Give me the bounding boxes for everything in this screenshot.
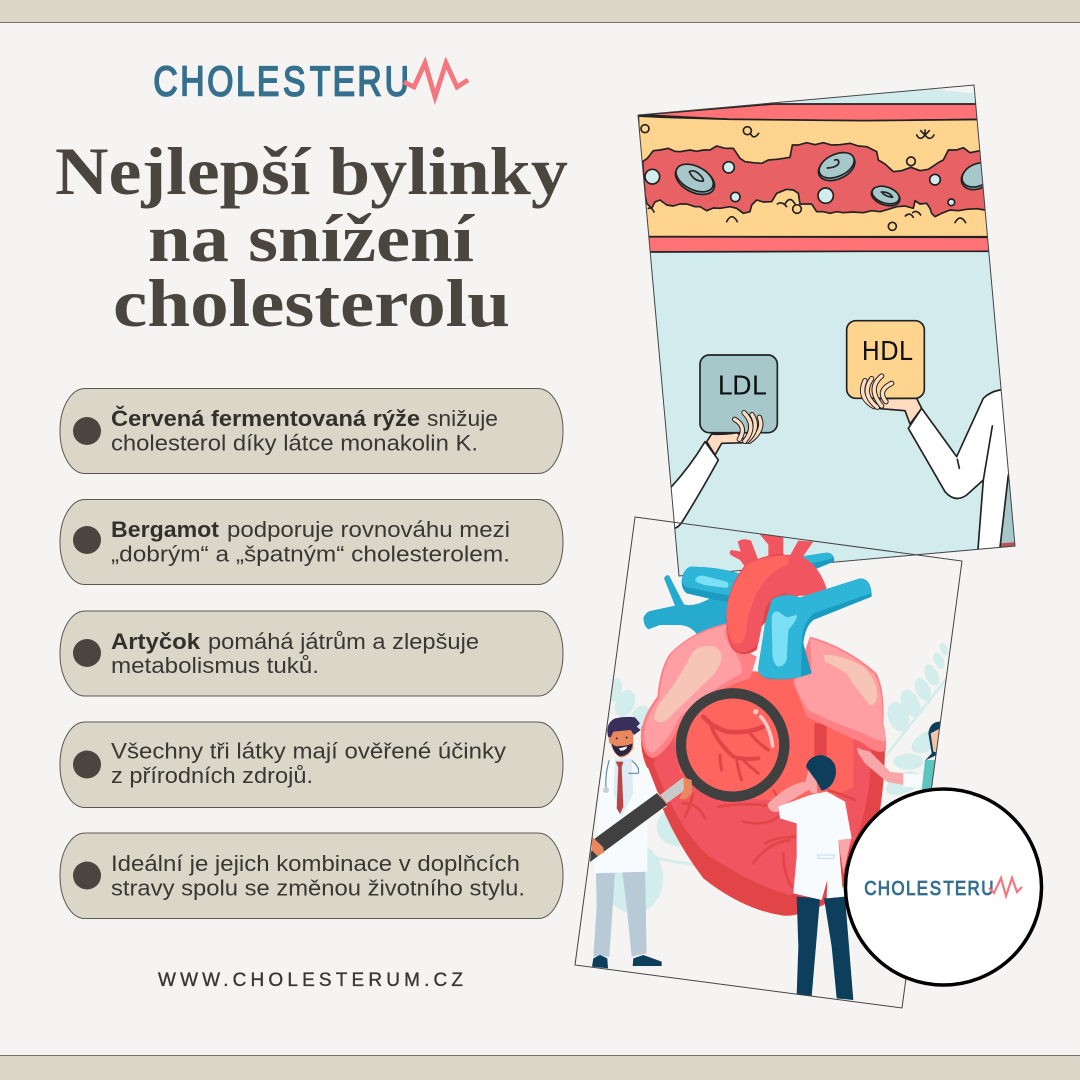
illustration: heart and doctors — [575, 517, 962, 1008]
list item 3: artichoke: pomáhá játrům a zlepšuje — [208, 629, 479, 654]
blood flow — [643, 143, 997, 217]
list item 2: bergamot: podporuje rovnováhu mezi — [227, 517, 510, 542]
list item 5: combination: Ideální je jejich kombinace v doplňcích — [111, 851, 520, 876]
stethoscope — [606, 760, 639, 788]
tie — [616, 762, 623, 814]
heart body — [641, 670, 885, 916]
artery wall — [638, 104, 997, 121]
illustration: artery with LDL and HDL — [630, 80, 1030, 590]
vessels behind heart — [643, 530, 834, 634]
title: cholesterolu — [113, 265, 510, 341]
hands — [592, 777, 692, 856]
badge: circular logo — [846, 789, 1042, 985]
list item 2: bergamot: „dobrým“ a „špatným“ cholesterolem. — [111, 542, 510, 566]
list item 5: combination — [60, 833, 563, 918]
magnifying glass — [681, 693, 784, 797]
teal and red corner — [1000, 480, 1014, 547]
website address: WWW.CHOLESTERUM.CZ — [158, 970, 463, 991]
list item 3: artichoke — [60, 611, 563, 696]
bottom bar — [0, 1056, 1080, 1080]
leaves — [603, 642, 953, 913]
list item 4: natural sources: Všechny tři látky mají ověřené účinky — [111, 738, 506, 764]
list item 1: red fermented rice: cholesterol díky látce monakolin K. — [111, 430, 478, 456]
doctor looking at the heart — [767, 755, 853, 1000]
LDL card — [700, 355, 777, 433]
blood cells — [671, 147, 998, 209]
list item 2: bergamot: Bergamot — [111, 517, 220, 542]
vena cava — [758, 578, 872, 679]
title — [55, 133, 568, 341]
pointing doctor — [857, 722, 940, 790]
LDL card: LDL — [718, 370, 766, 400]
logo: Cholesterum: CHOLESTERU — [153, 59, 409, 105]
right arm and hand — [863, 376, 1023, 553]
list item 3: artichoke: Artyčok — [111, 629, 201, 654]
list item 4: natural sources — [60, 722, 563, 808]
atria — [641, 623, 886, 758]
doctor with magnifier — [590, 717, 692, 968]
HDL card — [847, 321, 924, 398]
heart veins — [683, 790, 855, 887]
shoes — [592, 955, 662, 968]
list item 4: natural sources: z přírodních zdrojů. — [111, 763, 313, 788]
handle — [660, 777, 685, 803]
top bar — [0, 0, 1080, 22]
list item 5: combination: stravy spolu se změnou životního stylu. — [111, 876, 525, 900]
title: na snížení — [148, 200, 475, 276]
badge: circular logo: CHOLESTERU — [864, 877, 994, 899]
head — [608, 728, 633, 757]
title: Nejlepší bylinky — [55, 133, 568, 209]
list item 3: artichoke: metabolismus tuků. — [111, 653, 319, 678]
left arm and hand — [670, 413, 761, 528]
bubbles — [645, 162, 955, 206]
list item 1: red fermented rice: snižuje — [427, 406, 498, 431]
coat — [593, 758, 667, 873]
list item 2: bergamot — [60, 500, 563, 584]
HDL card: HDL — [862, 336, 912, 366]
list item 1: red fermented rice — [60, 388, 563, 474]
trousers — [593, 872, 647, 957]
aorta — [726, 554, 827, 654]
plaque marks — [641, 125, 966, 230]
list item 1: red fermented rice: Červená fermentovaná rýže — [111, 406, 420, 431]
